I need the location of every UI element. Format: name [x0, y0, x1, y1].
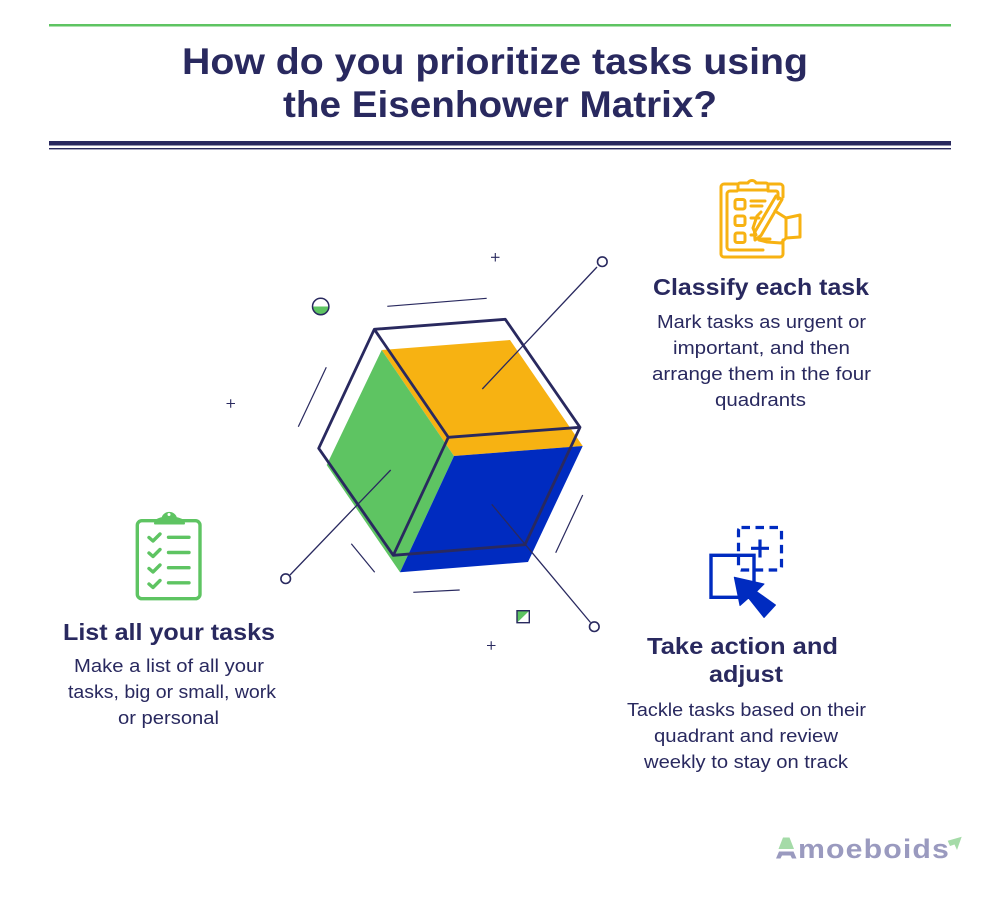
cube face: green [327, 350, 454, 572]
connector: classify [482, 257, 607, 389]
body text: quadrants [715, 389, 806, 410]
body text: Mark tasks as urgent or [657, 311, 866, 332]
body text: weekly to stay on track [643, 751, 849, 772]
cube face: blue [400, 446, 583, 572]
wireframe cube outline [319, 319, 580, 555]
body text: tasks, big or small, work [68, 681, 277, 702]
heading: Classify each task [653, 274, 869, 300]
body text: or personal [118, 707, 219, 728]
connector: take action [492, 504, 599, 632]
title: the Eisenhower Matrix? [283, 84, 717, 125]
icon: yellow clipboard with hand and pen [721, 181, 800, 257]
title: How do you prioritize tasks using [182, 41, 808, 82]
heading [647, 633, 838, 687]
body text: Tackle tasks based on their [627, 699, 866, 720]
heading: adjust [709, 661, 783, 687]
step: classify each task [652, 274, 871, 410]
body text: important, and then [673, 337, 850, 358]
body text: Make a list of all your [74, 655, 264, 676]
central cube illustration [226, 253, 607, 650]
title [182, 41, 808, 125]
accent dashes [298, 298, 583, 592]
icon: green checklist clipboard [137, 513, 200, 599]
plus marks [226, 253, 500, 650]
step: list all your tasks [63, 619, 277, 728]
cube face: yellow [382, 340, 583, 456]
half-filled square [517, 611, 529, 623]
body text [627, 699, 866, 772]
heading: List all your tasks [63, 619, 275, 645]
header rule: navy double [49, 141, 951, 149]
logo: Amoeboids: moeboids [798, 834, 950, 864]
half-filled circle [312, 298, 329, 315]
body text [652, 311, 871, 410]
step: take action and adjust [627, 633, 866, 772]
header rule: green [49, 24, 951, 26]
body text: arrange them in the four [652, 363, 871, 384]
connector: list [281, 470, 391, 584]
icon: blue selection square with cursor [711, 528, 782, 618]
body text [68, 655, 277, 728]
heading: Take action and [647, 633, 838, 659]
body text: quadrant and review [654, 725, 839, 746]
